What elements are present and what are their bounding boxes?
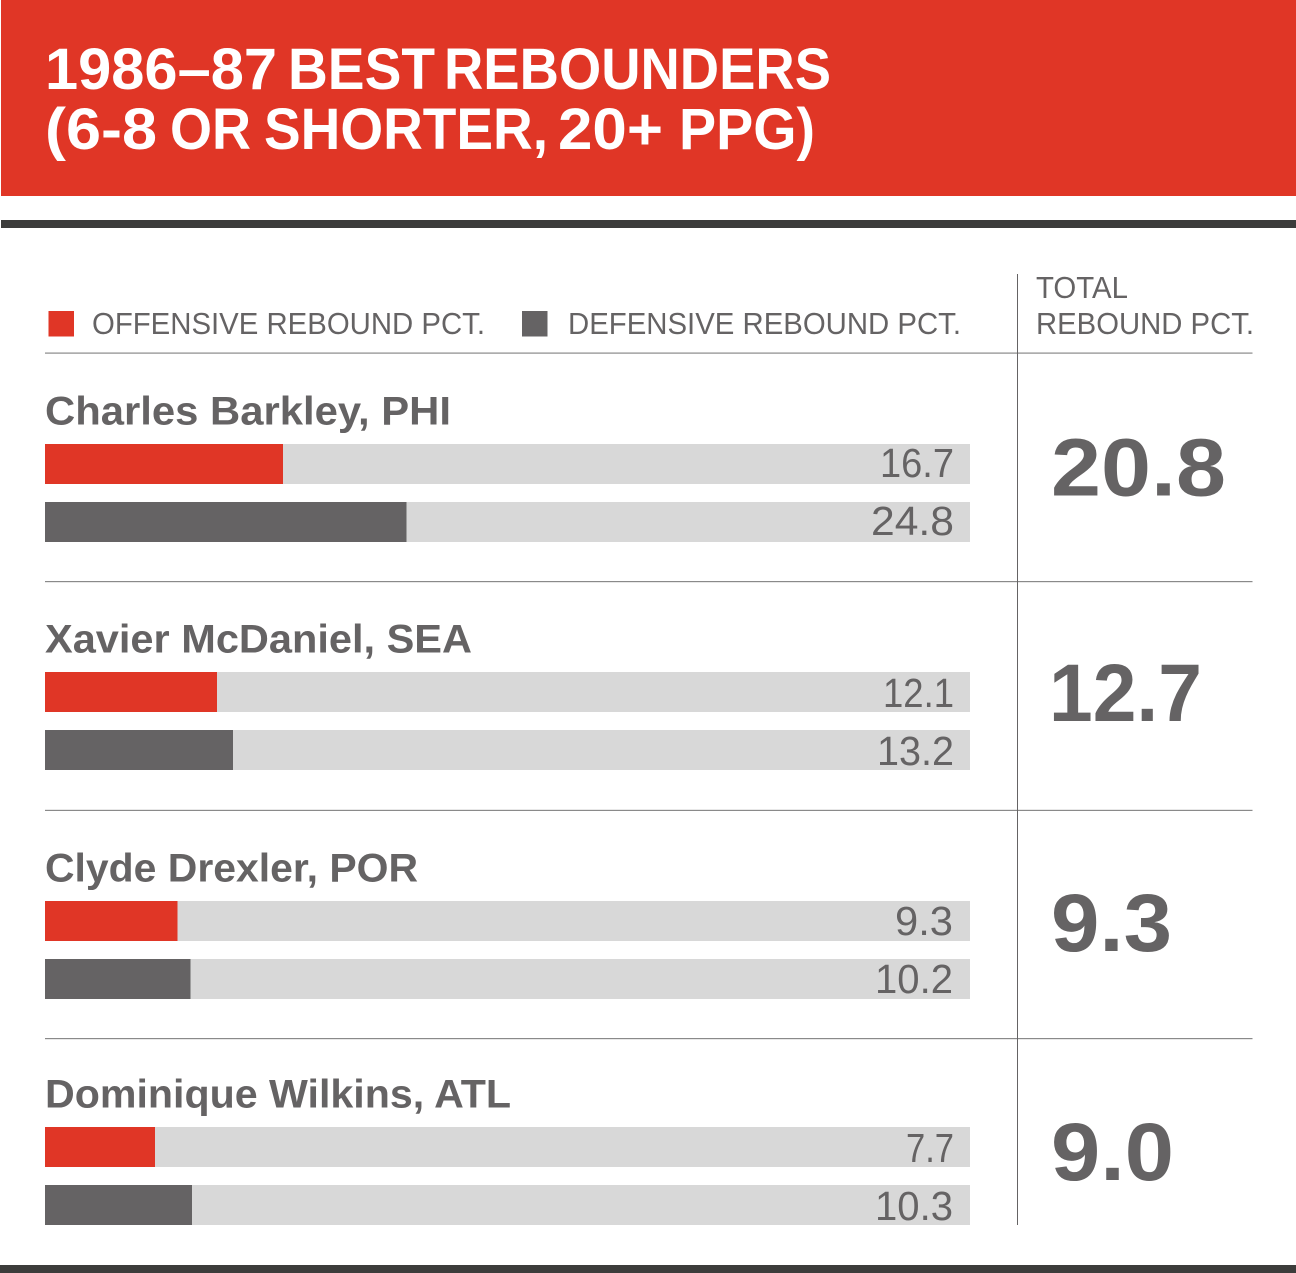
defensive bar: 24.8: [871, 498, 954, 544]
column heading: total rebound pct: TOTAL: [1036, 270, 1128, 305]
offensive bar: 9.3: [895, 898, 953, 944]
defensive bar: 10.2: [875, 956, 953, 1002]
offensive bar: 16.7: [880, 440, 954, 486]
panel: Dominique Wilkins: [45, 1072, 1174, 1229]
title text: 1986–87: [45, 37, 277, 102]
title text: [45, 37, 831, 162]
panel: Clyde Drexler: [45, 846, 1172, 1002]
defensive bar: [45, 1183, 970, 1229]
title text: BEST: [288, 37, 435, 102]
defensive bar: 10.3: [875, 1183, 953, 1229]
defensive bar: [45, 728, 970, 774]
defensive bar: [45, 498, 970, 544]
column heading: total rebound pct: REBOUND PCT.: [1036, 306, 1254, 341]
title text: PPG): [679, 97, 815, 162]
player name: Xavier McDaniel, SEA: [45, 618, 472, 662]
panel: Xavier McDaniel: [45, 618, 1202, 774]
defensive bar: [45, 956, 970, 1002]
panel: Charles Barkley: [45, 390, 1226, 544]
title banner: [1, 0, 1296, 196]
player name: Charles Barkley, PHI: [45, 390, 451, 434]
offensive bar: [45, 898, 970, 944]
table grid lines: [45, 274, 1252, 1225]
offensive bar: 12.1: [883, 670, 954, 716]
offensive bar: 7.7: [906, 1125, 954, 1171]
offensive bar: [45, 670, 970, 716]
legend: [48, 306, 961, 341]
bottom dark rule: [0, 1265, 1296, 1273]
total value: 9.0: [1051, 1107, 1174, 1198]
legend: offensive rebound pct: OFFENSIVE REBOUND PCT.: [92, 306, 485, 341]
total value: 12.7: [1049, 648, 1202, 739]
player name: Dominique Wilkins, ATL: [45, 1072, 511, 1116]
column heading: total rebound pct: [1036, 270, 1254, 341]
offensive bar: [45, 440, 970, 486]
legend: defensive rebound pct: DEFENSIVE REBOUND PCT.: [568, 306, 961, 341]
offensive bar: [45, 1125, 970, 1171]
defensive bar: 13.2: [877, 728, 954, 774]
title text: SHORTER,: [264, 97, 548, 162]
title text: (6-8: [45, 97, 157, 162]
title text: OR: [170, 97, 251, 162]
title text: 20+: [558, 97, 663, 162]
top dark rule: [1, 220, 1296, 228]
player name: Clyde Drexler, POR: [45, 846, 418, 890]
title text: REBOUNDERS: [444, 37, 831, 102]
total value: 20.8: [1051, 422, 1226, 514]
total value: 9.3: [1051, 878, 1172, 969]
